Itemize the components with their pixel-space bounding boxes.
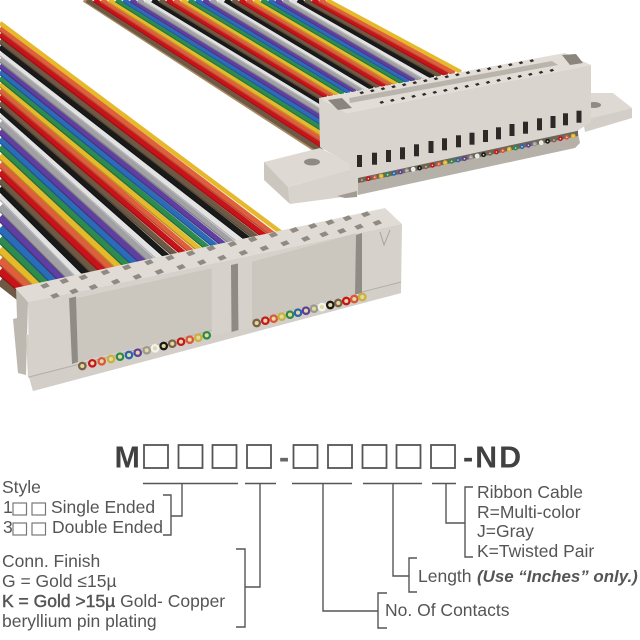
part number heading: [114, 440, 523, 474]
text block: connector finish: [2, 551, 225, 631]
text block: ribbon cable: J=Gray: [477, 521, 534, 541]
upper connector: [264, 53, 632, 204]
part number heading: -: [279, 440, 289, 474]
lower ribbon cable: [0, 23, 283, 302]
text block: length: [418, 566, 638, 586]
text block: length: (Use “Inches” only.): [477, 567, 638, 586]
upper ribbon cable: [84, 0, 461, 153]
bracket connector lines: [143, 484, 473, 628]
text block: style: Single Ended: [51, 497, 155, 517]
text block: ribbon cable: K=Twisted Pair: [477, 541, 594, 561]
text block: style: 1: [3, 497, 13, 517]
text block: connector finish: beryllium pin plating: [2, 611, 157, 631]
text block: length: Length: [418, 566, 472, 586]
text block: connector finish: Conn. Finish: [2, 551, 100, 571]
part number heading: -ND: [463, 440, 523, 474]
text block: ribbon cable: R=Multi-color: [477, 502, 581, 522]
text block: style: 3: [3, 517, 13, 537]
text block: style: Double Ended: [52, 517, 163, 537]
text block: style: [2, 477, 163, 537]
text block: connector finish: K = Gold >15µ Gold- Copper: [2, 591, 225, 611]
text block: ribbon cable: Ribbon Cable: [477, 482, 583, 502]
part number heading: M: [114, 440, 140, 474]
text block: number of contacts: No. Of Contacts: [385, 600, 510, 620]
lower connector: [13, 208, 402, 391]
text block: connector finish: G = Gold ≤15µ: [2, 571, 117, 591]
text block: style: Style: [2, 477, 41, 497]
text block: ribbon cable: [477, 482, 594, 561]
